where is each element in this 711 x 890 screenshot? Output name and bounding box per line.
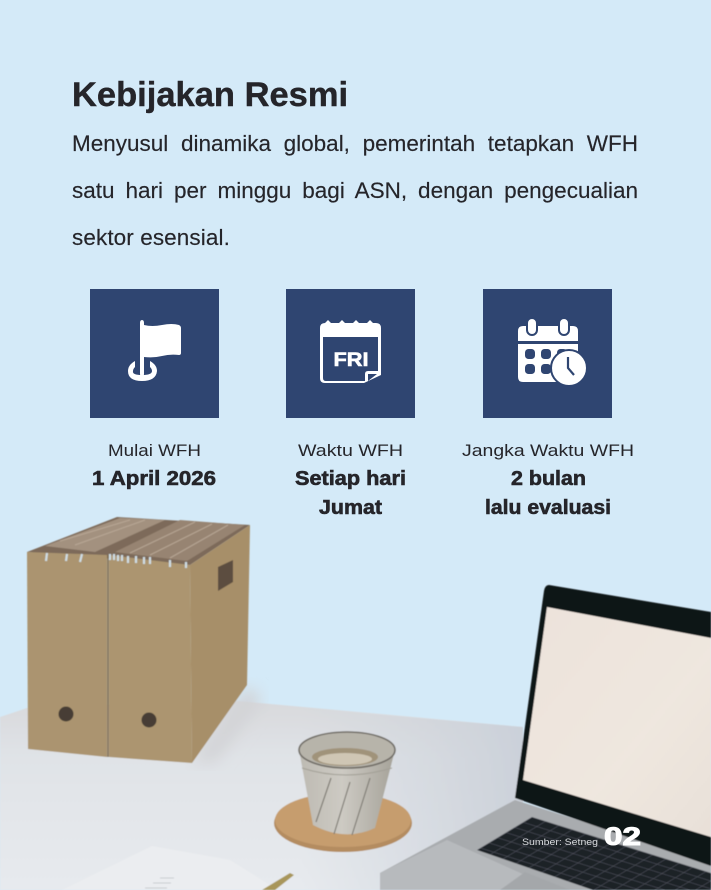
- file boxes: [27, 517, 250, 763]
- text: time: Waktu WFH: [298, 441, 403, 460]
- icon: calendar FRI: FRI: [334, 350, 368, 371]
- laptop: [380, 585, 711, 890]
- card: start date: [90, 289, 219, 490]
- card: time: [286, 289, 415, 519]
- body text: satu hari per minggu bagi ASN, dengan pengecualian: [72, 178, 638, 203]
- title: Kebijakan Resmi: [72, 76, 348, 114]
- coaster: [274, 794, 412, 852]
- card: duration: lalu evaluasi: [485, 497, 611, 519]
- source note: Sumber: Setneg: [522, 837, 598, 848]
- coffee cup: [299, 732, 395, 835]
- body text: [72, 131, 638, 250]
- card: duration: [462, 289, 634, 519]
- text: start date: Mulai WFH: [108, 441, 201, 460]
- body text: Menyusul dinamika global, pemerintah tetapkan WFH: [72, 131, 638, 156]
- card: time: Jumat: [319, 497, 382, 519]
- desk surface: [0, 701, 523, 890]
- icon: flag: [128, 320, 181, 381]
- card: duration: 2 bulan: [511, 468, 586, 490]
- card: time: Setiap hari: [295, 468, 406, 490]
- text: duration: Jangka Waktu WFH: [462, 441, 634, 460]
- notebook and pen: [62, 846, 294, 890]
- body text: sektor esensial.: [72, 225, 230, 250]
- icon: calendar with clock: [518, 318, 587, 386]
- page number: 02: [604, 823, 641, 851]
- icon: calendar FRI: [320, 320, 381, 383]
- card: start date: 1 April 2026: [92, 468, 216, 490]
